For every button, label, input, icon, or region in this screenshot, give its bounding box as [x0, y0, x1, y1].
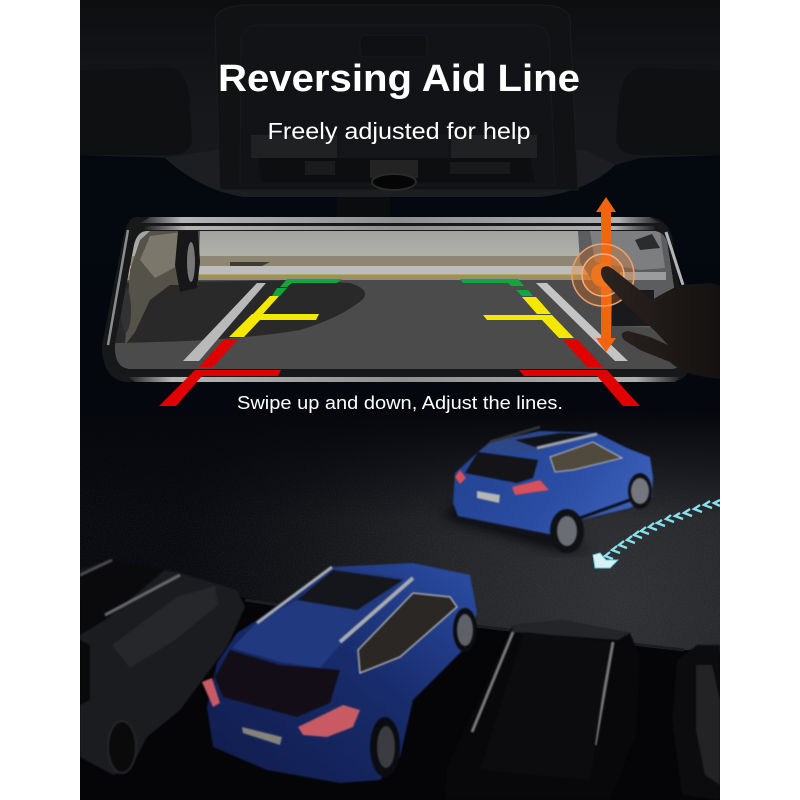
- panel: mirror screen camera view: [115, 231, 678, 369]
- car body: [207, 563, 477, 783]
- asphalt road: [100, 280, 700, 372]
- reversing guide lines: green: [272, 279, 533, 296]
- tail lights: [202, 678, 360, 737]
- wheels: [550, 473, 652, 553]
- scene: textured parking lot ground: [80, 430, 720, 652]
- licence plate: [242, 727, 282, 745]
- reversing guide lines: red: [159, 339, 640, 406]
- illustration: black parked car centre: [470, 620, 636, 746]
- illustration: blue SUV parked foreground: [202, 563, 477, 783]
- title: Reversing Aid Line: [218, 58, 580, 100]
- panel: rear-view mirror frame: [102, 217, 690, 382]
- car shadow: [110, 280, 365, 343]
- left parked car: [121, 231, 200, 345]
- car body: [452, 430, 654, 536]
- caption: Swipe up and down, Adjust the lines.: [237, 393, 563, 413]
- illustration: black parked car left: [80, 560, 245, 775]
- concrete wall: [131, 231, 670, 260]
- icon: hand swiping the mirror: [601, 266, 720, 379]
- scene: car interior roof and overhead console: [80, 0, 720, 217]
- illustration: blue SUV reversing: [453, 427, 653, 553]
- arrow: orange up and down swipe: [596, 197, 616, 352]
- reversing guide lines: yellow: [229, 296, 574, 338]
- icon: touch ripple rings: [572, 244, 634, 306]
- licence plate: [477, 491, 500, 503]
- subtitle: Freely adjusted for help: [268, 118, 530, 144]
- illustration: black parked car right: [690, 644, 720, 786]
- reversing guide line: left white: [183, 283, 266, 361]
- curb with yellow line: [100, 266, 700, 282]
- tail lights: [455, 470, 549, 495]
- reversing guide line: right white: [536, 283, 628, 361]
- right parked car: [578, 231, 680, 328]
- panel: dark infographic background: [80, 0, 720, 800]
- icon: curved reversing chevrons on ground: [593, 500, 720, 568]
- wheels: [370, 608, 477, 777]
